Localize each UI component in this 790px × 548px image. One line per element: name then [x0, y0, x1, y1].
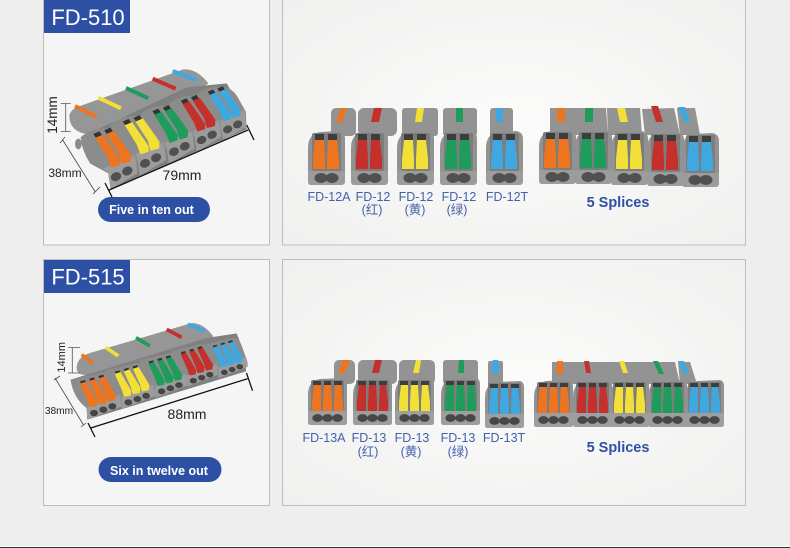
connector: FD-12T blue: [486, 108, 523, 185]
labels: FD-13 models: (黄): [401, 445, 421, 459]
panel: FD-515 product photo: [44, 260, 270, 506]
labels: FD-12 models: [307, 190, 529, 217]
dimension: 14mm: [56, 342, 80, 373]
connector: FD-12 yellow: [397, 108, 438, 185]
heading: FD-515: FD-515: [51, 264, 125, 290]
panel: FD-510 splice range: [282, 0, 746, 245]
connector: FD-12 red: [351, 108, 397, 185]
dimension: 38mm: 38mm: [48, 166, 82, 180]
heading: FD-510: [44, 0, 130, 33]
badge: Five in ten out: Five in ten out: [109, 203, 195, 217]
heading: FD-515: [44, 260, 130, 293]
dimension: 38mm: 38mm: [45, 406, 73, 417]
labels: FD-12 models: FD-12T: [486, 190, 529, 204]
connector: FD-13 green: [441, 360, 480, 425]
labels: FD-13 models: (红): [358, 444, 378, 459]
labels: FD-13 models: FD-13A: [302, 431, 346, 445]
labels: FD-13 models: FD-13: [352, 431, 386, 445]
dimension: 88mm: [88, 373, 252, 437]
connector: FD-13 red: [353, 360, 397, 425]
labels: FD-13 models: FD-13T: [483, 431, 526, 445]
dimension: 38mm: [45, 376, 86, 427]
labels: FD-13 models: (绿): [448, 444, 468, 459]
connector block: 5 splices FD-515: [534, 361, 724, 427]
connector: FD-12A orange: [308, 108, 356, 185]
connector: FD-13 yellow: [395, 360, 435, 425]
dimension: 14mm: 14mm: [56, 342, 68, 373]
labels: FD-12 models: (红): [362, 202, 382, 217]
dimension: 79mm: 79mm: [163, 167, 201, 183]
labels: FD-12 models: (黄): [405, 203, 425, 217]
badge: Six in twelve out: Six in twelve out: [110, 464, 209, 478]
labels: FD-12 models: FD-12: [399, 190, 433, 204]
connector: FD-13T blue: [485, 360, 524, 428]
labels: FD-12 models: FD-12A: [307, 190, 351, 204]
badge: Five in ten out: [98, 197, 210, 222]
labels: FD-12 models: FD-12: [442, 190, 476, 204]
labels: FD-13 models: FD-13: [441, 431, 475, 445]
labels: FD-13 models: [302, 431, 526, 459]
labels: FD-12 models: (绿): [447, 202, 467, 217]
connector image: FD-510: [69, 69, 247, 189]
labels: FD-12 models: FD-12: [356, 190, 390, 204]
badge: Six in twelve out: [98, 457, 222, 482]
dimension: 88mm: 88mm: [168, 406, 206, 422]
dimension: 79mm: [105, 125, 254, 197]
connector: FD-13A orange: [308, 360, 355, 425]
label: 5 Splices: 5 Splices: [587, 440, 649, 456]
connector block: 5 splices FD-510: [539, 106, 719, 187]
dimension: 14mm: 14mm: [45, 96, 60, 134]
dimension: 38mm: [48, 137, 100, 194]
labels: FD-13 models: FD-13: [395, 431, 429, 445]
connector: FD-12 green: [440, 108, 477, 185]
dimension: 14mm: [45, 96, 71, 134]
connector image: FD-515: [71, 323, 248, 420]
heading: FD-510: FD-510: [51, 5, 125, 30]
label: 5 Splices: 5 Splices: [587, 195, 649, 211]
panel: FD-515 splice range: [282, 260, 746, 506]
panel: FD-510 product photo: [44, 0, 270, 245]
